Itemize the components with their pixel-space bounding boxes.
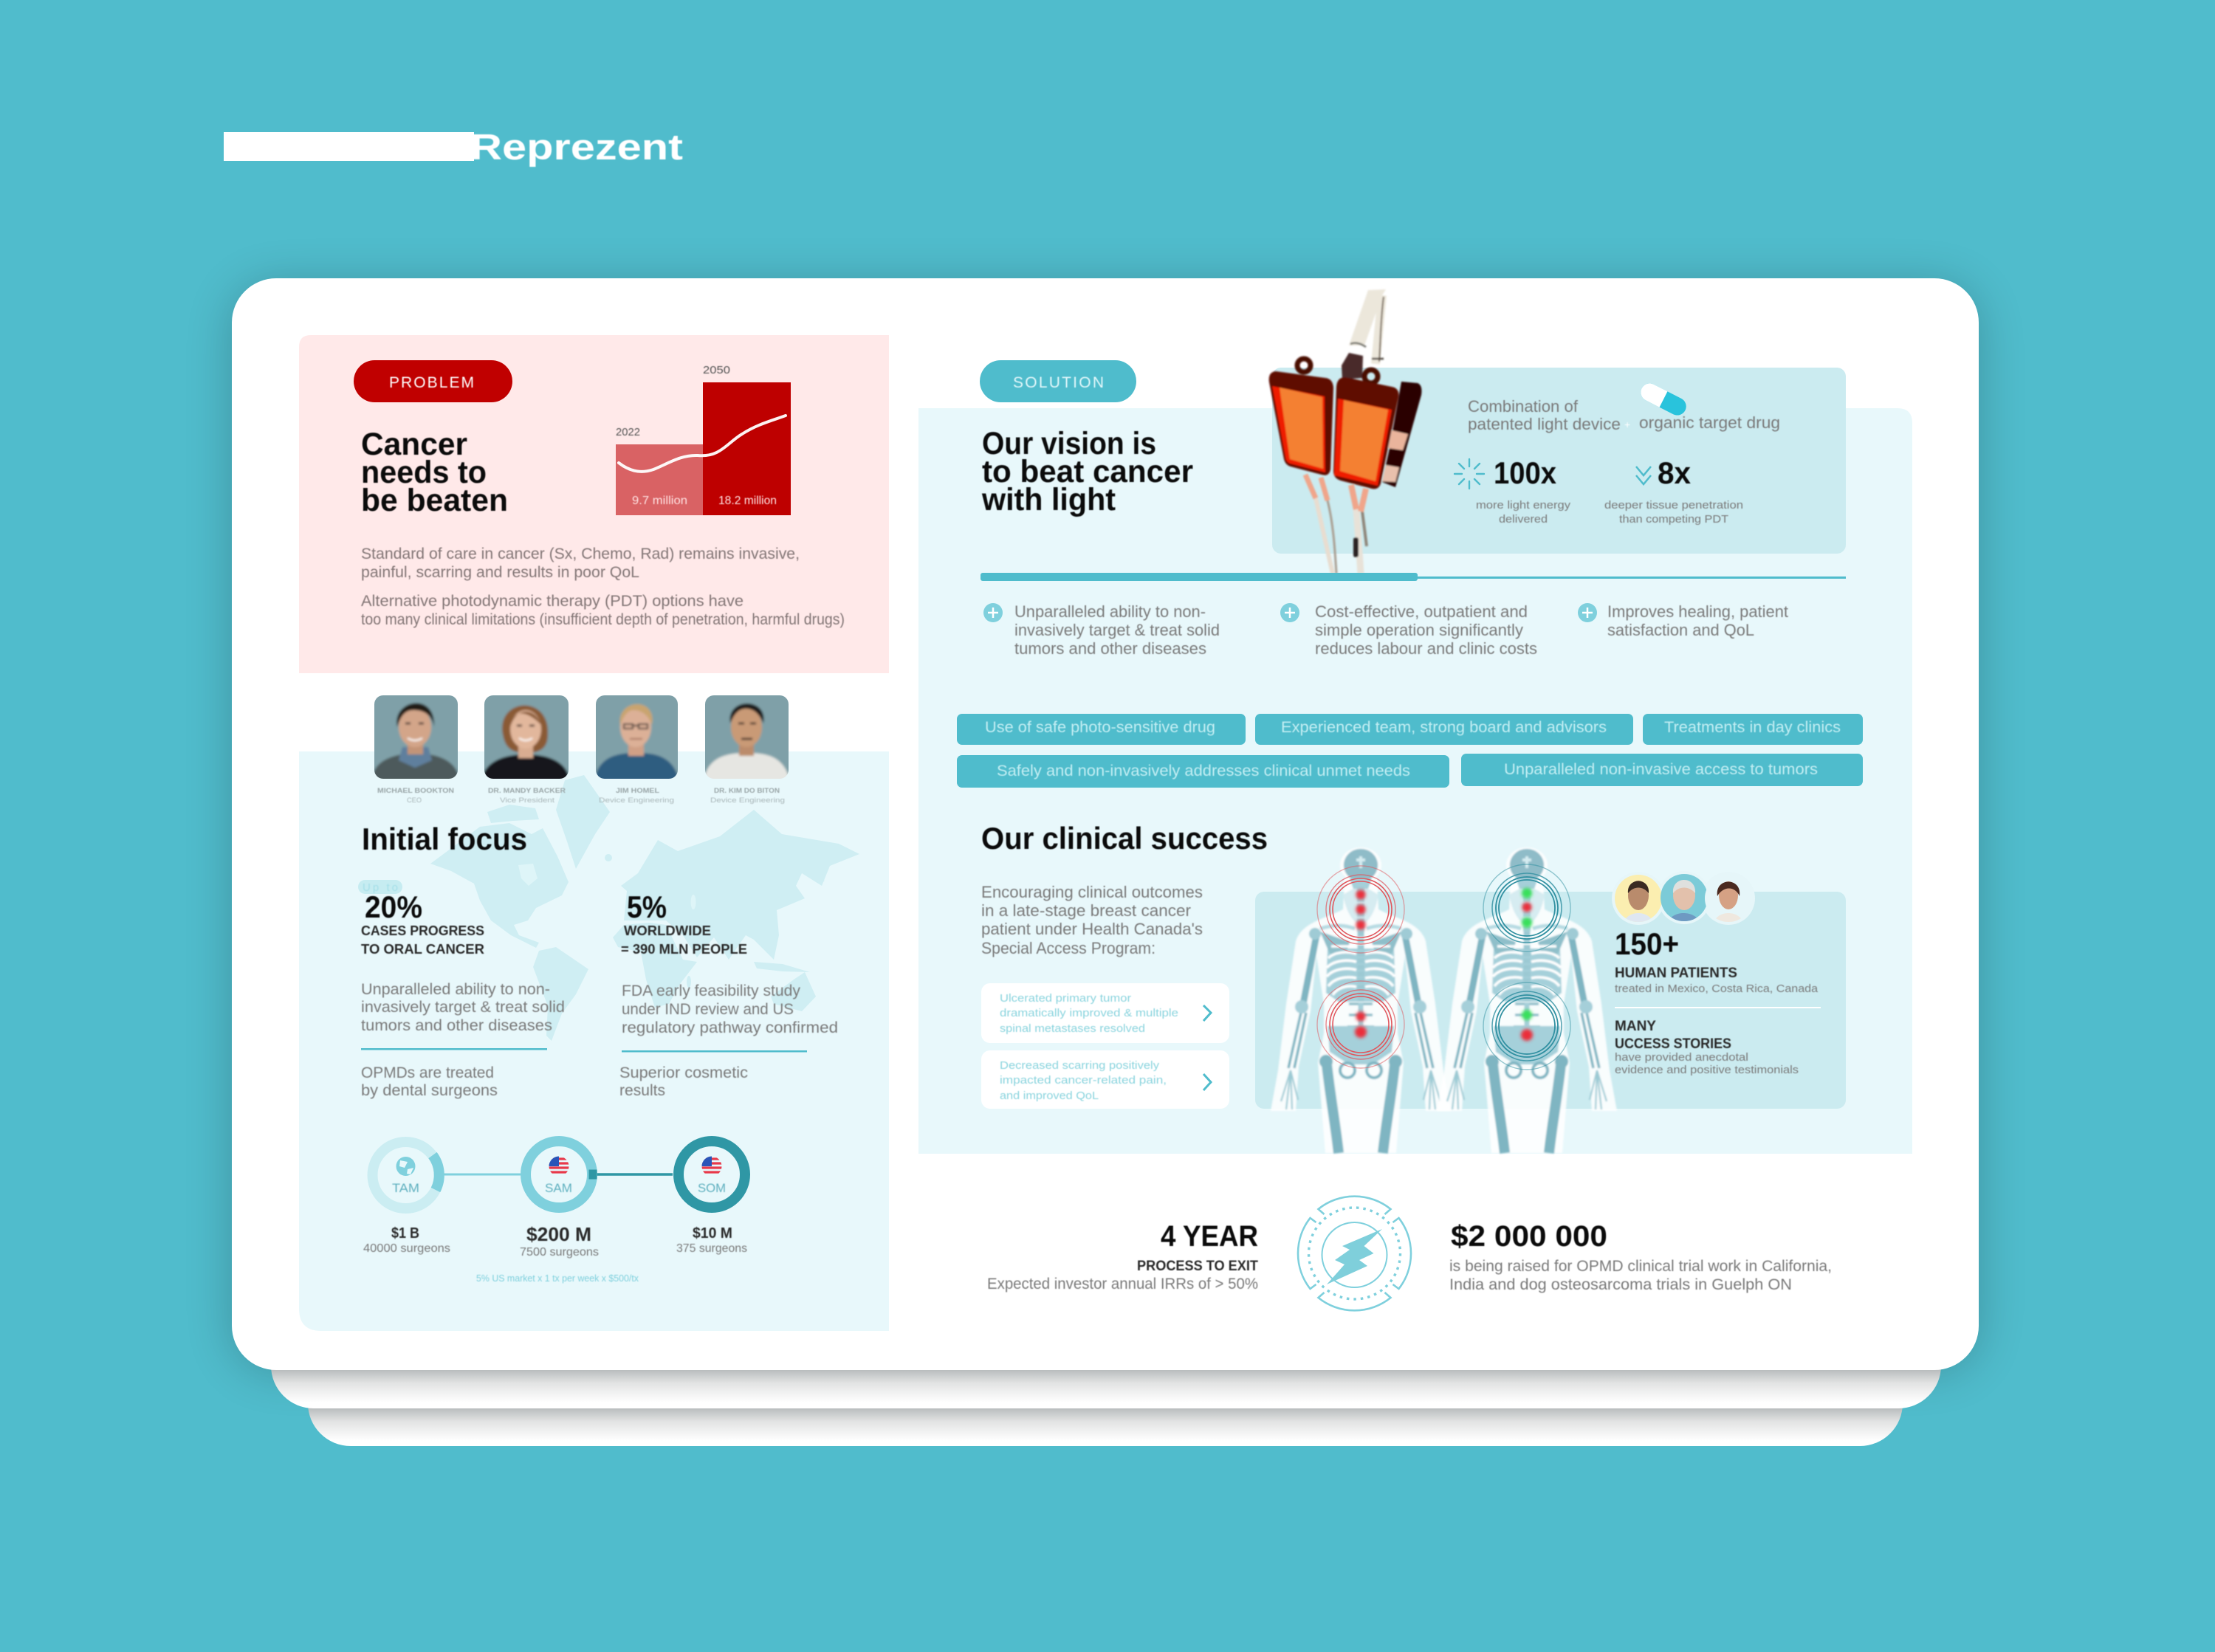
stat: many success stories [1615, 1019, 1799, 1076]
market values: 375 surgeons [676, 1242, 747, 1255]
box: patients [1255, 892, 1846, 1109]
stat: 8x: than competing PDT [1619, 513, 1728, 526]
stat: 150+ patients: 150+ [1615, 926, 1679, 961]
problem text: Alternative photodynamic therapy (PDT) options have [361, 593, 744, 610]
team names: Vice President [500, 796, 554, 805]
world map [430, 775, 859, 1041]
stat: 150+ patients: HUMAN PATIENTS [1615, 966, 1737, 981]
benefit 2 [1280, 602, 1537, 658]
icon: lightning emblem [1298, 1197, 1411, 1310]
text: combination of device and drug [1468, 397, 1780, 433]
portrait: Jim [596, 695, 678, 779]
text: combination of device and drug: patented light device [1468, 415, 1621, 433]
team names: MICHAEL BOOKTON [377, 787, 454, 795]
team names [377, 787, 785, 805]
text: oral cancer column: tumors and other diseases [361, 1017, 552, 1034]
stat: 100x: delivered [1499, 513, 1548, 526]
progress divider [981, 573, 1846, 581]
stat: up to 20% [358, 880, 484, 957]
outcome card 1: spinal metastases resolved [1000, 1022, 1145, 1035]
heading: cancer needs to be beaten: Cancer [361, 427, 467, 462]
text: oral cancer column [361, 981, 565, 1099]
stat: up to 20%: Up to [363, 881, 398, 894]
skeleton: after treatment [1437, 847, 1617, 1153]
feature tags [957, 714, 1863, 788]
problem pill: PROBLEM [389, 374, 474, 391]
SAM ring: SAM [545, 1181, 572, 1195]
team names: DR. KIM DO BITON [714, 787, 780, 795]
funding ask: $2 000 000 [1451, 1220, 1607, 1253]
bar chart: cancer cases 2022 vs 2050: 9.7 million [632, 495, 687, 507]
panel: solution [918, 289, 1912, 1154]
panel: problem [299, 335, 889, 673]
SOM ring [679, 1141, 745, 1208]
funding ask: India and dog osteosarcoma trials in Guelph ON [1449, 1276, 1792, 1293]
stat: 8x: deeper tissue penetration [1604, 499, 1743, 512]
stat: 8x [1604, 455, 1743, 526]
TAM ring [372, 1142, 439, 1208]
problem text: too many clinical limitations (insufficient depth of penetration, harmful drugs) [361, 611, 845, 628]
stat: 8x: 8x [1658, 455, 1692, 490]
process to exit [987, 1220, 1258, 1293]
SOM ring: SOM [698, 1181, 726, 1195]
stat: many success stories: have provided anecdotal [1615, 1051, 1748, 1064]
stat: 5%: = 390 MLN PEOPLE [621, 942, 747, 957]
icon: capsule [1638, 380, 1689, 419]
market values: 40000 surgeons [363, 1242, 450, 1255]
market values [363, 1223, 747, 1284]
stat: up to 20%: 20% [365, 889, 422, 924]
box: combination therapy [1272, 368, 1846, 554]
feature tags: Experienced team, strong board and advisors [1281, 719, 1607, 736]
text: regulatory column [619, 982, 838, 1099]
text: combination of device and drug: Combination of [1468, 397, 1579, 416]
portrait: Michael [374, 695, 458, 779]
outcome card 2: and improved QoL [1000, 1090, 1099, 1102]
team names: Device Engineering [599, 796, 674, 805]
benefit 1 [983, 602, 1220, 658]
stat: 5%: WORLDWIDE [624, 923, 711, 938]
main card [232, 278, 1979, 1370]
outcome card 2: impacted cancer-related pain, [1000, 1074, 1167, 1087]
funding ask: is being raised for OPMD clinical trial work in California, [1449, 1258, 1832, 1275]
text: clinical outcomes [981, 883, 1203, 957]
text: clinical outcomes: Encouraging clinical outcomes [981, 883, 1203, 901]
feature tags: Safely and non-invasively addresses clinical unmet needs [997, 763, 1410, 779]
outcome card 2: Decreased scarring positively [1000, 1059, 1160, 1072]
team names: JIM HOMEL [616, 787, 659, 795]
benefit 3: Improves healing, patient [1607, 602, 1788, 621]
market values: 5% US market x 1 tx per week x $500/tx [476, 1273, 639, 1284]
process to exit: 4 YEAR [1161, 1220, 1258, 1253]
text: oral cancer column: OPMDs are treated [361, 1064, 494, 1081]
outcome card 1: dramatically improved & multiple [1000, 1007, 1178, 1019]
stat: 100x: more light energy [1476, 499, 1571, 512]
stat: 5%: 5% [627, 889, 667, 924]
outcome card 1 [981, 983, 1229, 1043]
team portraits [369, 690, 794, 805]
heading: our vision: with light [981, 482, 1116, 517]
benefit 1: tumors and other diseases [1014, 639, 1206, 658]
text: oral cancer column: by dental surgeons [361, 1082, 498, 1099]
market values: 7500 surgeons [520, 1246, 599, 1259]
problem text [361, 545, 845, 628]
feature tags: Unparalleled non-invasive access to tumors [1504, 761, 1818, 778]
stat: many success stories: MANY [1615, 1019, 1656, 1034]
benefit 3: satisfaction and QoL [1607, 621, 1754, 639]
team names: CEO [407, 796, 422, 805]
heading: cancer needs to be beaten [361, 427, 508, 518]
feature tags: Treatments in day clinics [1664, 719, 1841, 736]
text: regulatory column: regulatory pathway confirmed [622, 1019, 838, 1036]
outcome card 2 [981, 1050, 1229, 1109]
text: regulatory column: under IND review and US [622, 1001, 794, 1018]
skeleton: before treatment [1271, 847, 1451, 1153]
text: clinical outcomes: Special Access Program: [981, 939, 1155, 957]
process to exit: PROCESS TO EXIT [1137, 1259, 1258, 1274]
bar chart: cancer cases 2022 vs 2050 [616, 364, 791, 515]
text: regulatory column: FDA early feasibility study [622, 982, 800, 999]
portrait: Kim [705, 695, 789, 779]
text: clinical outcomes: in a late-stage breast cancer [981, 901, 1191, 920]
team names: DR. MANDY BACKER [488, 787, 566, 795]
market values: $200 M [526, 1223, 591, 1245]
text: clinical outcomes: patient under Health Canada's [981, 920, 1203, 938]
stat: up to 20%: CASES PROGRESS [361, 923, 484, 938]
bar chart: cancer cases 2022 vs 2050: 2022 [616, 426, 640, 438]
patient avatars [1612, 874, 1755, 925]
stat: up to 20%: TO ORAL CANCER [361, 942, 484, 957]
panel: initial focus [299, 690, 889, 1331]
heading: cancer needs to be beaten: needs to [361, 455, 487, 490]
stat: 150+ patients [1615, 926, 1821, 1008]
SAM ring [526, 1141, 597, 1208]
text: regulatory column: Superior cosmetic [619, 1064, 748, 1081]
heading: clinical success: Our clinical success [981, 821, 1268, 856]
text: oral cancer column: Unparalleled ability to non- [361, 981, 550, 998]
benefit 1: Unparalleled ability to non- [1014, 602, 1206, 621]
outcome card 1: Ulcerated primary tumor [1000, 992, 1131, 1005]
text: combination of device and drug: organic target drug [1639, 413, 1780, 432]
stat: many success stories: UCCESS STORIES [1615, 1036, 1731, 1052]
bar chart: cancer cases 2022 vs 2050: 18.2 million [718, 495, 777, 507]
team names: Device Engineering [710, 796, 785, 805]
market size funnel: TAM SAM SOM [363, 1141, 747, 1284]
stat: 5% [621, 889, 747, 957]
device illustration [1269, 289, 1421, 574]
market values: $10 M [693, 1225, 732, 1242]
heading: our vision: Our vision is [982, 426, 1156, 461]
benefit 2: reduces labour and clinic costs [1315, 639, 1537, 658]
text: regulatory column: results [619, 1082, 665, 1099]
process to exit: Expected investor annual IRRs of > 50% [987, 1276, 1258, 1293]
solution pill: SOLUTION [1013, 374, 1104, 391]
stat: 100x: 100x [1494, 455, 1557, 490]
stat: 100x [1455, 455, 1571, 526]
text: combination of device and drug: + [1624, 419, 1630, 430]
funding ask [1449, 1220, 1832, 1293]
stat: 150+ patients: treated in Mexico, Costa Rica, Canada [1615, 982, 1819, 995]
heading: initial focus: Initial focus [362, 822, 527, 856]
bar chart: cancer cases 2022 vs 2050: 2050 [703, 364, 730, 376]
stat: many success stories: evidence and positive testimonials [1615, 1064, 1799, 1076]
benefit 1: invasively target & treat solid [1014, 621, 1220, 639]
problem text: painful, scarring and results in poor QoL [361, 564, 639, 581]
portrait: Mandy [484, 695, 569, 779]
avatar 1 [1615, 875, 1661, 922]
market values: $1 B [391, 1225, 419, 1242]
avatar 3 [1705, 881, 1741, 922]
heading: our vision [981, 426, 1193, 517]
feature tags: Use of safe photo-sensitive drug [985, 719, 1215, 736]
logo: Reprezent: Reprezent [470, 128, 683, 168]
avatar 2 [1661, 874, 1707, 921]
logo: Reprezent [224, 128, 683, 168]
problem text: Standard of care in cancer (Sx, Chemo, Rad) remains invasive, [361, 545, 800, 562]
stacked page layers [232, 284, 1979, 1446]
TAM ring: TAM [392, 1181, 419, 1195]
benefit 2: simple operation significantly [1315, 621, 1523, 639]
heading: our vision: to beat cancer [982, 454, 1193, 489]
solution pill [980, 360, 1136, 402]
benefit 3 [1578, 602, 1788, 639]
problem pill [354, 360, 512, 402]
text: oral cancer column: invasively target & treat solid [361, 999, 565, 1016]
benefit 2: Cost-effective, outpatient and [1315, 602, 1528, 621]
heading: cancer needs to be beaten: be beaten [361, 483, 508, 518]
